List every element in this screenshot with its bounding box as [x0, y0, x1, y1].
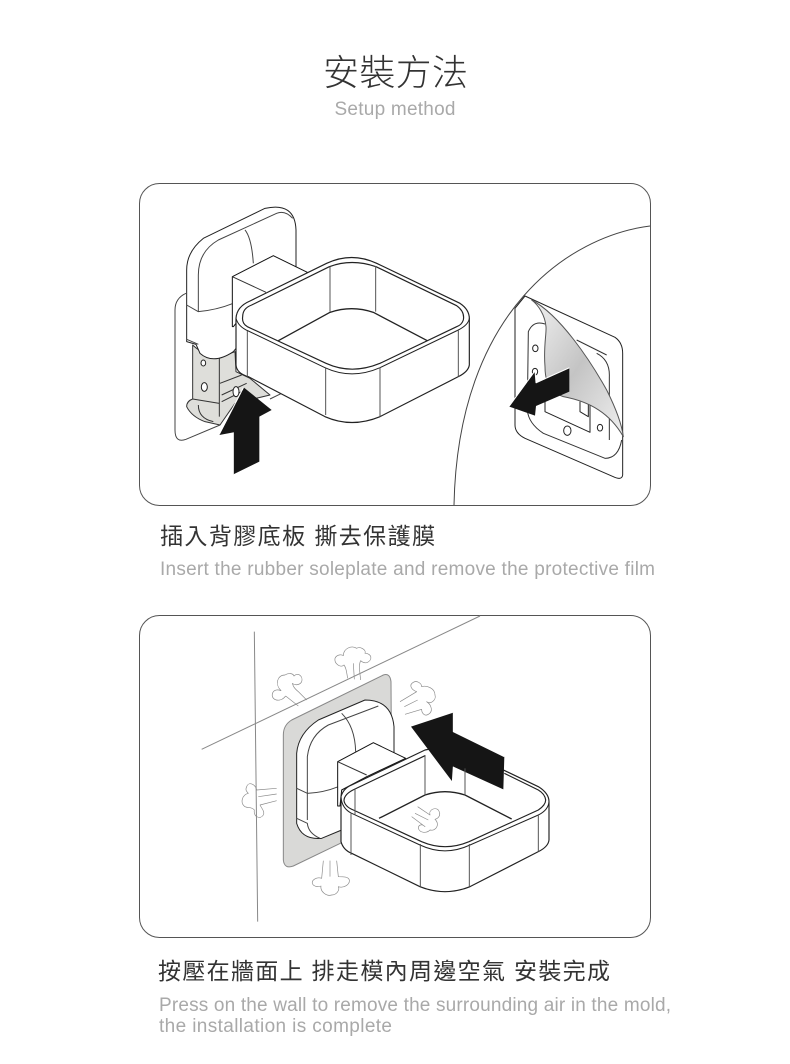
arrow push: [411, 713, 504, 789]
holder detail lines: [297, 706, 378, 838]
arrow highlight: [509, 368, 569, 406]
basket rim front: [341, 797, 549, 851]
puff left: [242, 784, 277, 817]
inset circle line: [454, 226, 650, 505]
wall lines: [202, 616, 480, 922]
description line 1: Press on the wall to remove the surrounding air in the mold,: [159, 995, 671, 1016]
basket floor: [379, 792, 512, 819]
grey adhesive sheet: [283, 675, 392, 867]
holder detail lines: [187, 212, 293, 344]
basket body: [341, 748, 549, 892]
peeled film: [532, 300, 623, 437]
basket seams: [247, 266, 458, 417]
puff right: [400, 682, 435, 715]
basket floor: [278, 309, 427, 341]
step 1 description: Insert the rubber soleplate and remove the protective film: [160, 559, 655, 580]
panel frame: [140, 616, 650, 938]
puff in basket: [412, 807, 440, 832]
grey bracket: [187, 345, 270, 425]
basket inner rim: [344, 756, 546, 847]
wall holder: [187, 207, 296, 359]
mounting holes: [532, 345, 603, 435]
illustration: peeling film: [509, 296, 623, 478]
puff bottom: [312, 861, 349, 895]
illustration: holder and basket: [175, 207, 469, 474]
step 1 heading: 插入背膠底板 撕去保護膜: [160, 523, 435, 549]
basket seams: [351, 755, 538, 887]
arrow highlight: [219, 388, 243, 474]
illustration: press on wall: [202, 616, 549, 922]
basket inner rim: [243, 262, 464, 369]
step 2 heading: 按壓在牆面上 排走模內周邊空氣 安裝完成: [158, 958, 610, 984]
subtitle: Setup method: [334, 99, 456, 120]
connector edge: [232, 277, 266, 292]
connector edge: [338, 762, 367, 775]
arrow highlight: [452, 713, 504, 782]
arrow up: [219, 388, 272, 474]
square opening: [545, 387, 590, 432]
panel: step 2: [140, 616, 650, 938]
arrow left: [509, 368, 569, 416]
connector block: [232, 256, 309, 327]
step 2 description: [159, 995, 671, 1037]
basket body: [236, 257, 469, 422]
title: 安裝方法: [323, 52, 468, 93]
description line 2: the installation is complete: [159, 1016, 392, 1037]
recess outline: [527, 323, 622, 458]
puff top: [335, 647, 371, 680]
panel frame: [140, 184, 650, 506]
panel: step 1: [140, 184, 650, 506]
connector block: [338, 743, 406, 806]
bracket details: [193, 358, 247, 422]
adhesive plate: [515, 296, 623, 478]
air puffs: [242, 647, 435, 895]
bracket holes: [201, 360, 239, 397]
back plate: [175, 293, 282, 440]
basket rim front: [236, 318, 469, 374]
puff upper left: [272, 674, 307, 706]
wall holder: [297, 700, 394, 838]
